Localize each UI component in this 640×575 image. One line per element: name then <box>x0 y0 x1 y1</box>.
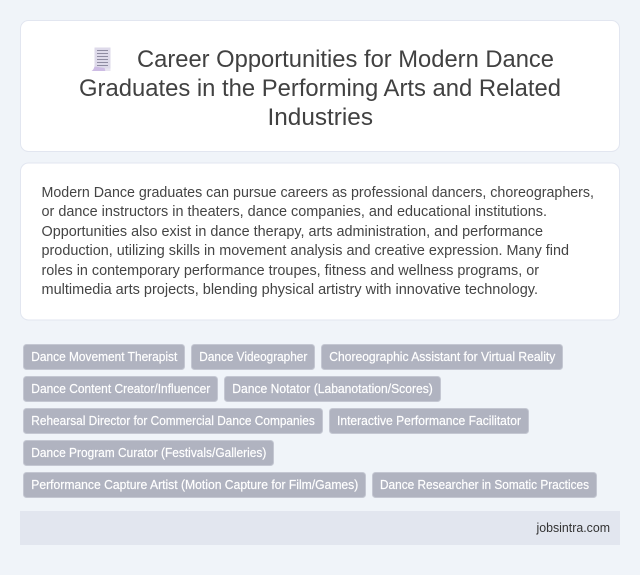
tag: Dance Program Curator <box>24 440 274 466</box>
tag: Dance Notator: Dance Notator (Labanotation/Scores) <box>232 382 433 396</box>
text block: description: Modern Dance graduates can pursue careers as professional dancers, choreographers, <box>42 185 594 201</box>
text block: description <box>42 185 594 298</box>
tag: Dance Content Creator/Influencer <box>24 376 218 402</box>
title: Industries <box>268 104 373 131</box>
tag: Dance Researcher in Somatic Practices: Dance Researcher in Somatic Practices <box>380 478 589 492</box>
tag: Dance Videographer <box>192 344 314 370</box>
tag: Choreographic Assistant for Virtual Reality: Choreographic Assistant for Virtual Reality <box>329 350 556 364</box>
title <box>79 46 561 131</box>
text block: description: roles in contemporary performance troupes, fitness and wellness programs, or <box>42 263 539 279</box>
text block: description: multimedia arts projects, blending physical artistry with innovative technology. <box>42 282 538 298</box>
icon: scroll document <box>92 48 110 71</box>
tag: Dance Movement Therapist: Dance Movement Therapist <box>31 350 178 364</box>
panel: career tags <box>24 344 596 498</box>
tag: Dance Program Curator: Dance Program Curator (Festivals/Galleries) <box>31 446 266 460</box>
text block: description: Opportunities also exist in dance therapy, arts administration, and performance <box>42 224 543 240</box>
title: Graduates in the Performing Arts and Related <box>79 75 561 102</box>
tag: Rehearsal Director <box>24 408 322 434</box>
text block: description: or dance instructors in theaters, dance companies, and educational institutions. <box>42 204 547 220</box>
footer source text: jobsintra.com <box>536 520 610 535</box>
tag: Choreographic Assistant for Virtual Reality <box>322 344 562 370</box>
tag: Dance Researcher in Somatic Practices <box>372 472 596 498</box>
tag: Dance Movement Therapist <box>24 344 184 370</box>
panel: description card <box>20 163 620 320</box>
tag: Dance Content Creator/Influencer: Dance Content Creator/Influencer <box>31 382 210 396</box>
tag: Performance Capture Artist <box>24 472 366 498</box>
tag: Rehearsal Director: Rehearsal Director for Commercial Dance Companies <box>31 414 315 428</box>
tag: Performance Capture Artist: Performance Capture Artist (Motion Capture for Film/Games) <box>31 478 358 492</box>
tag: Dance Videographer: Dance Videographer <box>199 350 307 364</box>
text block: description: production, utilizing skills in movement analysis and creative expression. Many find <box>42 243 569 259</box>
tag: Interactive Performance Facilitator: Interactive Performance Facilitator <box>337 414 521 428</box>
tag: Interactive Performance Facilitator <box>330 408 528 434</box>
tag: Dance Notator <box>224 376 440 402</box>
title: Career Opportunities for Modern Dance <box>137 46 554 73</box>
footer <box>20 511 620 545</box>
panel: header card <box>20 20 620 152</box>
